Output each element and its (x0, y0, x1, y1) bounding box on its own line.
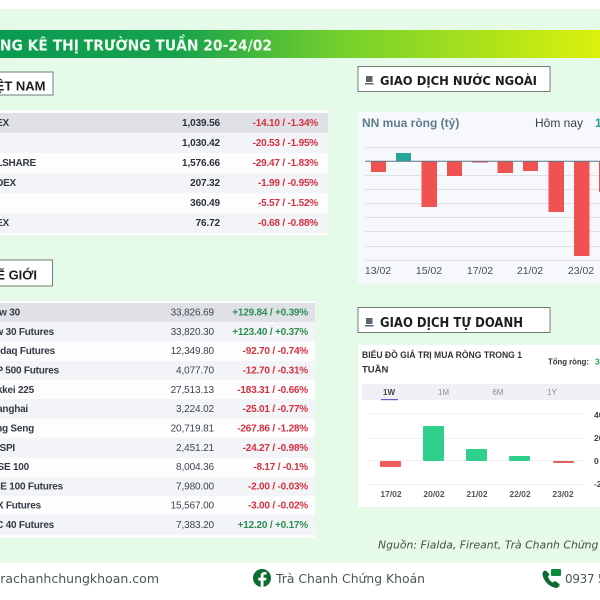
table: world indices: 15,567.00 (171, 500, 215, 512)
table: world indices: 8,004.36 (176, 462, 215, 473)
table: Vietnam indices: 360.49 (190, 198, 221, 209)
table: world indices: -92.70 / -0.74% (243, 346, 308, 357)
table: world indices: -267.86 / -1.28% (237, 424, 308, 434)
icon: facebook (253, 569, 271, 587)
bars: net value (380, 426, 574, 467)
table: world indices: -3.00 / -0.02% (248, 500, 308, 512)
table: world indices: 33,820.30 (171, 327, 215, 338)
facebook name: Trà Chanh Chứng Khoán (275, 571, 425, 586)
table: world indices: +123.40 / +0.37% (232, 327, 308, 338)
panel: foreign net buying chart: 23/02 (568, 265, 594, 277)
table: Vietnam indices: -20.53 / -1.95% (253, 138, 318, 149)
table: world indices: -8.17 / -0.1% (253, 462, 308, 473)
heading: foreign trading: GIAO DỊCH NƯỚC NGOÀI (380, 73, 537, 88)
table: world indices: +129.84 / +0.39% (232, 308, 308, 318)
period tabs: 1M (438, 388, 449, 397)
panel: proprietary net buying chart: 22/02 (509, 489, 531, 499)
panel: proprietary net buying chart: Tổng ròng: (548, 356, 589, 366)
table: Vietnam indices: 1,576.66 (182, 158, 221, 169)
table: Vietnam indices: -1.99 / -0.95% (258, 178, 318, 189)
table: world indices: -25.01 / -0.77% (243, 404, 308, 415)
table: world indices: 3,224.02 (176, 404, 215, 415)
panel: foreign net buying chart: 17/02 (467, 265, 493, 277)
table: Vietnam indices: 207.32 (190, 178, 221, 189)
table: world indices (0, 301, 315, 538)
panel: foreign net buying chart: 13/02 (365, 265, 391, 277)
bars: daily net buying (371, 153, 600, 256)
table: Vietnam indices: -5.57 / -1.52% (258, 198, 318, 209)
table: world indices: -24.27 / -0.98% (243, 443, 308, 454)
panel: proprietary net buying chart: TUẦN (362, 364, 389, 376)
panel: proprietary net buying chart: 21/02 (466, 489, 488, 499)
panel: foreign net buying chart (358, 112, 600, 284)
period tabs: 6M (492, 388, 504, 397)
table: Vietnam indices: 76.72 (196, 218, 221, 229)
panel: proprietary net buying chart: 0 (594, 456, 599, 466)
icon: laptop (365, 318, 374, 326)
panel: proprietary net buying chart: BIỂU ĐỒ GIÁ TRỊ MUA RÒNG TRONG 1 (362, 349, 523, 361)
table: world indices: 12,349.80 (171, 346, 215, 357)
heading: proprietary trading (358, 308, 550, 332)
footer (0, 563, 600, 600)
table: world indices: -12.70 / -0.31% (243, 366, 308, 376)
table: world indices: 2,451.21 (176, 443, 215, 454)
heading: Việt Nam (0, 72, 53, 95)
table: Vietnam indices: -0.68 / -0.88% (258, 218, 318, 229)
table: world indices: +12.20 / +0.17% (238, 520, 308, 531)
table: world indices: -183.31 / -0.66% (237, 385, 308, 396)
period tabs: 1W (383, 388, 395, 397)
panel: proprietary net buying chart (358, 345, 600, 507)
heading: Thế giới (0, 260, 52, 286)
panel: foreign net buying chart: 15/02 (416, 265, 442, 277)
table: Vietnam indices: 1,039.56 (182, 118, 221, 129)
table: world indices: 4,077.70 (176, 366, 215, 376)
table: world indices: 27,513.13 (171, 385, 215, 396)
heading: proprietary trading: GIAO DỊCH TỰ DOANH (380, 315, 523, 331)
panel: proprietary net buying chart: 23/02 (552, 489, 574, 499)
table: world indices: 7,980.00 (176, 482, 215, 492)
table: world indices: -2.00 / -0.03% (248, 482, 308, 492)
panel: proprietary net buying chart: 17/02 (380, 489, 402, 499)
table: Vietnam indices: 1,030.42 (182, 138, 221, 149)
table: Vietnam indices: -29.47 / -1.83% (253, 158, 318, 169)
panel: foreign net buying chart: NN mua ròng (tỷ) (362, 116, 459, 130)
period tabs (362, 384, 600, 400)
panel: foreign net buying chart: Hôm nay (535, 116, 583, 130)
table: world indices: 7,383.20 (176, 520, 215, 531)
table: world indices: 20,719.81 (171, 424, 215, 434)
period tabs: 1Y (547, 388, 558, 397)
table: Vietnam indices: -14.10 / -1.34% (253, 118, 318, 129)
panel: proprietary net buying chart: 3 (595, 356, 600, 366)
heading: foreign trading (358, 66, 550, 92)
panel: foreign net buying chart: 21/02 (517, 265, 543, 277)
table: Vietnam indices (0, 110, 328, 235)
title banner (0, 30, 600, 58)
icon: laptop (365, 76, 374, 84)
panel: proprietary net buying chart: 20/02 (423, 489, 445, 499)
table: world indices: 33,826.69 (171, 308, 215, 318)
icon: phone (543, 569, 561, 588)
